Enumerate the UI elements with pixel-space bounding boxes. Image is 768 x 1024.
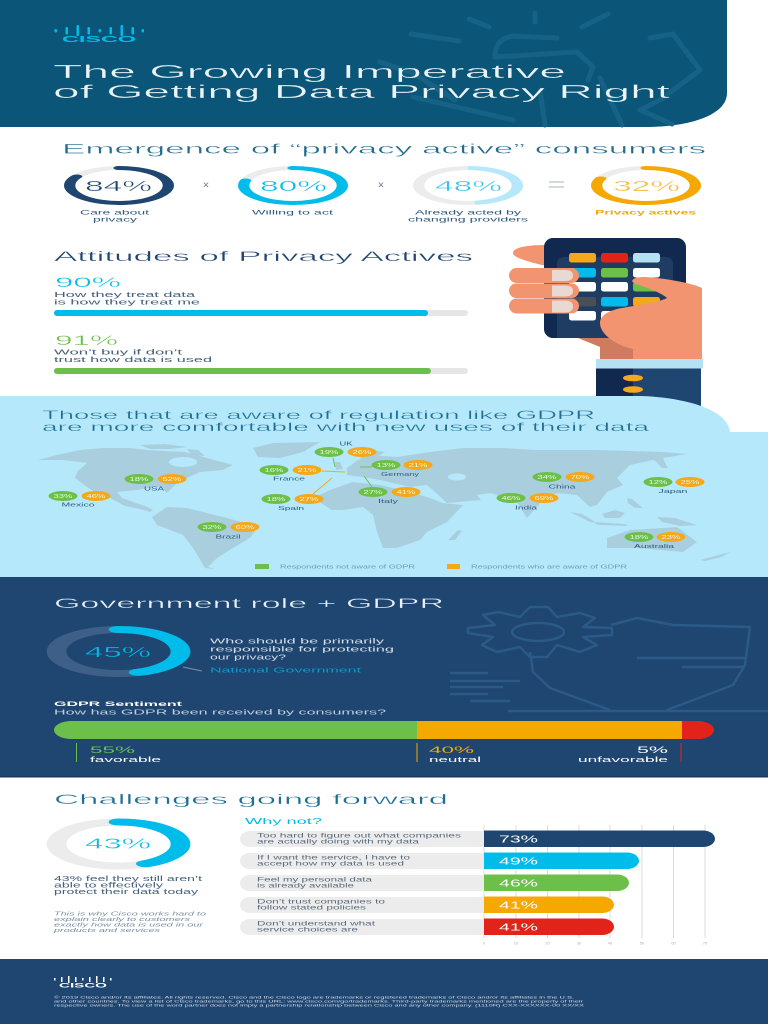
data: Italy [358,487,420,505]
data: India: 69% [534,496,554,502]
data: Spain [262,494,324,512]
data: Mexico: 33% [54,494,73,500]
chart: 48% already acted: 48% [435,178,502,195]
data: UK: 26% [352,450,372,456]
data: Italy: 27% [364,490,383,496]
data: Japan [644,477,704,495]
data: Italy: 41% [396,490,416,496]
map: world landmass [38,442,730,569]
data: Mexico [48,491,110,508]
stat: 90% bar: How they treat data [54,292,195,299]
data: USA: USA [144,486,165,492]
text: cisco note: exactly how data is used in our [54,922,204,928]
label: unfavorable [578,743,681,764]
row: 41% trust [240,896,614,913]
icon: hand holding phone [509,238,703,410]
data: Italy: Italy [378,499,398,505]
chart: 80% willing to act [244,168,342,216]
data: Australia: 23% [662,535,681,541]
heading: emergence: Emergence of “privacy active” consumers [62,142,707,156]
label: unfavorable: 5% [637,745,669,756]
title [53,62,670,102]
data: Japan: 12% [648,480,668,486]
axis labels [483,940,708,946]
data: Australia: 18% [630,535,649,541]
data: Japan: 25% [680,480,700,486]
row: 49%: accept how my data is used [257,860,405,868]
data: Spain: 18% [266,497,286,503]
text: 43% description: able to effectively [54,882,164,890]
data: Germany: 21% [408,463,428,469]
text: national government: National Government [210,668,361,674]
label: unfavorable: unfavorable [578,757,668,764]
data: Germany [372,460,432,478]
data: Brazil: Brazil [216,534,240,540]
data: France: 16% [264,468,284,474]
chart: 32% privacy actives: 32% [613,178,680,195]
data: Germany: 13% [376,463,396,469]
leader lines [313,458,372,494]
data: Brazil: 60% [236,525,255,531]
heading: map title [42,408,650,434]
sleeve [596,359,703,410]
data: France [260,465,322,482]
axis labels: 70 [703,940,708,946]
label: favorable: 55% [90,745,136,756]
row: 41% understand: 41% [499,922,538,934]
panel: government role [0,577,768,778]
label: neutral: 40% [429,745,475,756]
label: favorable: favorable [90,757,161,764]
axis labels: 40 [608,940,613,946]
text: cisco note: This is why Cisco works hard to [54,912,206,918]
row: 41% understand [240,918,614,935]
label: neutral: neutral [429,757,482,764]
text: cisco note [52,912,206,934]
grid lines [484,825,705,938]
data: USA [124,474,186,492]
row: 73%: are actually doing with my data [257,838,420,846]
chart: 48% already acted: changing providers [408,216,530,224]
row: 49%: If I want the service, I have to [257,854,411,862]
data: Mexico: 46% [86,494,106,500]
chart: 80% willing to act: 80% [260,178,327,195]
row: 41% trust: Don’t trust companies to [257,898,386,906]
data: China: 34% [538,475,557,481]
upper finger [513,245,546,266]
text: question: responsible for protecting [210,646,394,654]
chart: why not bars [240,825,715,946]
stat: 91% bar: trust how data is used [54,357,212,364]
chart: 32% privacy actives: Privacy actives [595,210,697,216]
phone [544,238,686,338]
data: India: 46% [502,496,521,502]
row: 41% understand: Don’t understand what [257,920,375,928]
chart: 84% care about privacy: 84% [85,178,152,195]
label: favorable [76,743,161,764]
row: 73% [240,830,715,847]
data: China [532,472,594,490]
panel: map section [0,396,768,577]
data: India [496,493,558,512]
chart: 48% already acted [408,168,530,224]
data: India: India [515,506,539,512]
stat: 90% bar: is how they treat me [54,300,200,306]
text: legal: respective owners. The use of the word partner does not imply a partnership relationship between Cisco and any other company. (1110R) CXX-XXXXXX-00 XX/XX [54,1004,585,1008]
row: 41% trust: 41% [499,900,538,912]
chart: 84% care about privacy: privacy [93,216,139,224]
chart: 45% national government: 45% [85,644,151,661]
panel: header [0,0,727,127]
text: 43% description: protect their data today [54,889,199,896]
data: Spain: 27% [300,497,319,503]
chart: 80% willing to act: Willing to act [252,210,333,216]
stat: 90% bar [54,274,468,316]
heading: GDPR sentiment [54,701,386,716]
text: 43% description [54,876,202,896]
icon: multiply: × [203,180,209,192]
text: 43% description: 43% feel they still aren’t [54,876,202,883]
chart: 48% already acted: Already acted by [415,210,523,216]
heading: why not: Why not? [245,816,323,826]
row: 73%: Too hard to figure out what companies [257,832,462,840]
data: Brazil [198,522,260,540]
text: question: Who should be primarily [210,638,385,646]
chart: 43% feel unprotected: 43% [85,836,151,852]
axis labels: 50 [640,940,645,946]
chart: 43% feel unprotected [56,822,181,866]
logo: cisco header [54,25,144,44]
row: 49% [240,852,639,869]
icon: gear and shield watermark [450,607,768,711]
chart: 45% national government [56,630,202,674]
row: 46%: 46% [499,878,538,890]
data: Mexico: Mexico [62,502,94,508]
text: legal: and other countries. To view a list of Cisco trademarks, go to this URL: www.cisco.com/go/trademarks. Third-party trademarks mentioned are the property of their [54,1000,585,1004]
legend: Respondents who are aware of GDPR [471,564,628,570]
heading: GDPR sentiment: How has GDPR been received by consumers? [54,710,386,716]
axis labels: 30 [577,940,582,946]
data: Brazil: 32% [202,525,222,531]
palm and thumb [600,277,702,359]
row: 46% [240,874,629,891]
text: legal: © 2019 Cisco and/or its affiliates. All rights reserved. Cisco and the Cisco logo are trademarks or registered trademarks of Cisco and/or its affiliates in the U.S. [54,996,574,1000]
text: cisco note: explain clearly to customers [54,917,191,923]
icon: multiply: × [378,180,384,192]
row: 73%: 73% [499,834,538,846]
panel: footer [0,959,768,1024]
logo: cisco header: CISCO [62,35,136,44]
legend [255,564,628,570]
row: 49%: 49% [499,856,538,868]
wrist [578,335,640,359]
heading: GDPR sentiment: GDPR Sentiment [54,701,184,708]
axis labels: 0 [483,940,486,946]
text: question [210,638,394,662]
stat: 90% bar: 90% [55,274,121,290]
label: neutral [417,743,482,764]
chart: sentiment bar [54,721,714,739]
data: Spain: Spain [278,506,304,512]
heading: challenges: Challenges going forward [54,791,448,807]
chart: 32% privacy actives [595,168,697,216]
row: 46%: is already available [257,882,355,890]
axis labels: 20 [545,940,550,946]
stat: 91% bar [54,332,468,374]
text: legal [54,996,585,1008]
data: Japan: Japan [658,489,688,495]
chart: 84% care about privacy: Care about [80,210,149,216]
heading: map title: are more comfortable with new uses of their data [42,420,650,434]
chart: 84% care about privacy [70,168,168,224]
icon: faint chain and hand watermark [380,13,700,125]
data: USA: 18% [130,477,149,483]
heading: Government role + GDPR [54,595,444,611]
legend: Respondents not aware of GDPR [280,564,416,570]
data: Germany: Germany [381,472,419,478]
stat: 91% bar: Won’t buy if don’t [54,350,182,356]
row: 46%: Feel my personal data [257,876,373,884]
heading: map title: Those that are aware of regulation like GDPR [42,408,596,422]
row: 41% understand: service choices are [257,926,359,934]
data: UK: 19% [320,450,339,456]
data: France: France [273,476,305,482]
row: 41% trust: follow stated policies [257,904,367,912]
stat: 91% bar: 91% [55,332,118,348]
data: Australia [624,532,686,550]
title: of Getting Data Privacy Right [53,82,670,102]
fingers [509,268,579,314]
text: question: our privacy? [210,654,286,662]
logo: cisco footer [54,976,112,990]
data: UK [314,442,376,457]
text: cisco note: products and services [52,928,161,934]
logo: cisco footer: CISCO [59,984,108,990]
data: UK: UK [340,442,353,448]
data: France: 21% [298,468,317,474]
title: The Growing Imperative [53,62,566,82]
heading: attitudes: Attitudes of Privacy Actives [54,248,473,264]
icon: equals [549,182,564,187]
axis labels: 60 [671,940,676,946]
data: China: 70% [570,475,590,481]
axis labels: 10 [514,940,519,946]
data: China: China [548,484,577,490]
data: Australia: Australia [634,544,676,550]
data: USA: 52% [162,477,182,483]
